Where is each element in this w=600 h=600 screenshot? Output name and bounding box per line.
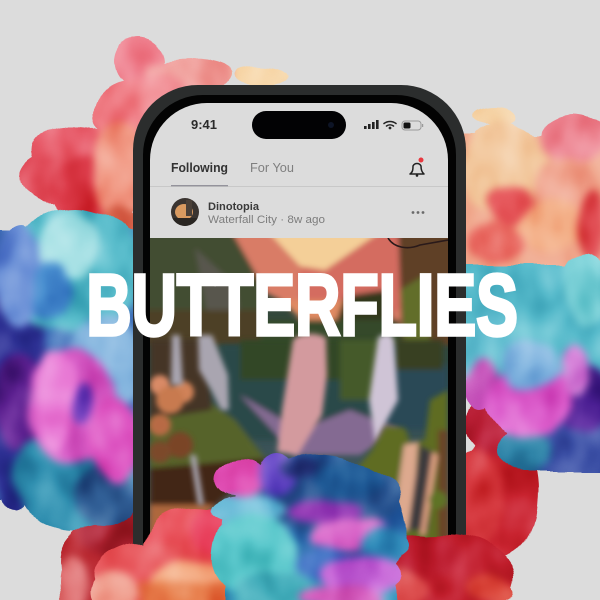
phone: inner bezel	[143, 95, 456, 600]
smoke cloud: right red	[447, 395, 538, 555]
tab: Following: Following	[171, 160, 228, 175]
scene: white right waterfall	[369, 334, 398, 442]
post subtitle: Waterfall City · 8w ago	[208, 214, 325, 226]
phone: dynamic island	[252, 111, 346, 139]
icon: signal bars	[364, 120, 379, 129]
icon: more menu	[412, 211, 424, 214]
smoke cloud: bottom right red	[365, 533, 515, 600]
avatar	[171, 198, 199, 226]
smoke cloud: upper right peach	[455, 108, 600, 280]
smoke cloud: left lower red	[58, 500, 151, 600]
phone: screen header	[150, 103, 448, 238]
smoke cloud: bottom left coral	[91, 508, 260, 600]
smoke cloud: upper left red	[18, 35, 289, 243]
tab underline	[171, 186, 228, 187]
scene: sunset sky	[150, 238, 448, 348]
icon: battery	[402, 121, 423, 130]
scene: left waterfalls	[171, 335, 229, 505]
post author: Dinotopia	[208, 201, 260, 213]
tab: For You: For You	[250, 160, 294, 175]
phone	[133, 85, 466, 546]
smoke cloud: right blue and magenta	[455, 252, 600, 470]
waterfall scene	[150, 238, 448, 538]
smoke cloud: bottom centre blue and magenta	[211, 453, 409, 600]
phone: outer frame	[133, 85, 466, 600]
icon: notification bell	[410, 158, 424, 177]
phone: status time: 9:41	[191, 117, 217, 132]
smoke cloud: left blue and magenta	[0, 208, 150, 527]
scene: right mossy rocks and falls	[356, 388, 448, 538]
scene: pink central waterfall	[277, 334, 327, 455]
scene: orange trees	[149, 375, 194, 463]
icon: wifi	[384, 122, 396, 129]
scene: green valley and mist	[150, 338, 448, 533]
scene: tree branches	[388, 238, 448, 248]
